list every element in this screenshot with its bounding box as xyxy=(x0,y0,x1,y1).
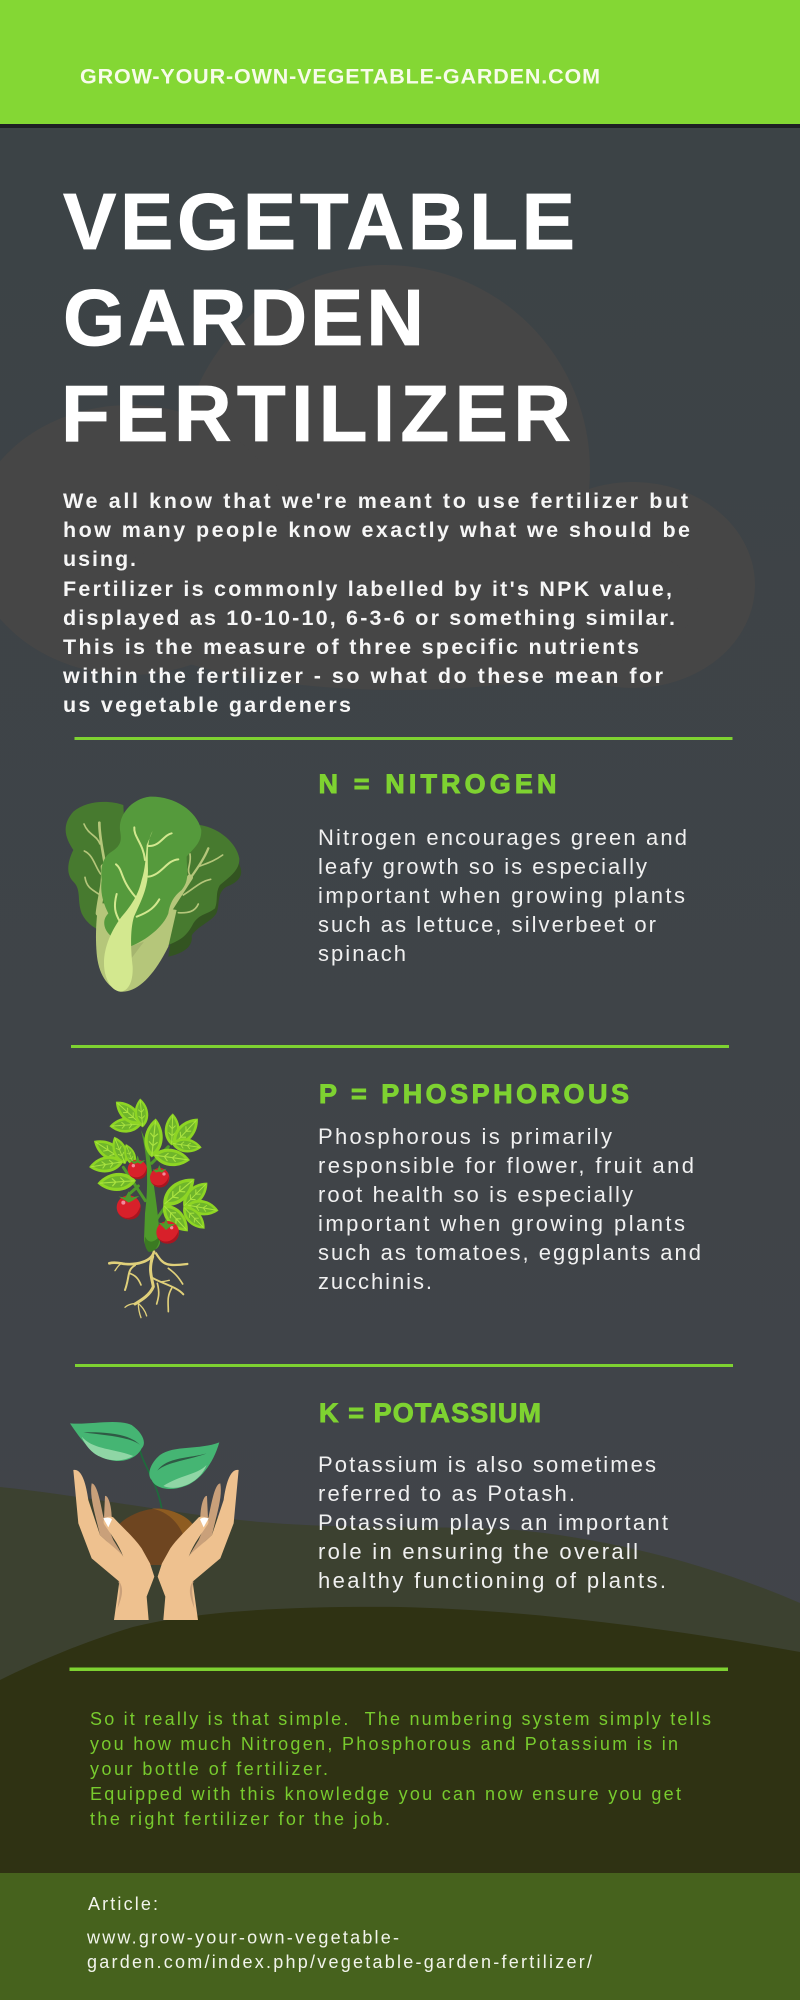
closing text: you how much Nitrogen, Phosphorous and Potassium is in xyxy=(90,1734,678,1754)
text: phosphorous body: such as tomatoes, eggplants and xyxy=(318,1240,701,1265)
text: phosphorous body: root health so is especially xyxy=(318,1182,633,1207)
text: phosphorous body: zucchinis. xyxy=(318,1269,432,1294)
text: potassium body: role in ensuring the overall xyxy=(318,1539,638,1564)
intro text: This is the measure of three specific nutrients xyxy=(63,635,639,659)
text: phosphorous body: responsible for flower, fruit and xyxy=(318,1153,694,1178)
title: FERTILIZER xyxy=(61,369,571,458)
intro text: We all know that we're meant to use fertilizer but xyxy=(63,489,688,513)
left hand xyxy=(73,1470,154,1620)
roots xyxy=(109,1252,187,1318)
footer band xyxy=(0,1873,800,2000)
icon: tomato plant xyxy=(88,1096,220,1318)
leaves xyxy=(109,1116,142,1134)
text: nitrogen body: important when growing plants xyxy=(318,883,685,908)
closing text: So it really is that simple. The numbering system simply tells xyxy=(90,1709,711,1729)
heading: phosphorous: P = PHOSPHOROUS xyxy=(319,1079,629,1109)
article url: www.grow-your-own-vegetable- xyxy=(86,1928,399,1948)
text: nitrogen body: Nitrogen encourages green and xyxy=(318,825,687,850)
background front hill xyxy=(0,1607,800,1873)
right hand xyxy=(158,1470,239,1620)
closing text: your bottle of fertilizer. xyxy=(90,1759,328,1779)
text: nitrogen body: leafy growth so is especially xyxy=(318,854,647,879)
seedling xyxy=(139,1447,162,1508)
intro text: within the fertilizer - so what do these mean for xyxy=(62,664,664,688)
text: potassium body: Potassium plays an important xyxy=(318,1510,668,1535)
text: potassium body: referred to as Potash. xyxy=(318,1481,575,1506)
section: phosphorous xyxy=(318,1079,701,1294)
title: VEGETABLE xyxy=(63,177,575,266)
text: phosphorous body: important when growing plants xyxy=(318,1211,685,1236)
intro text xyxy=(62,489,690,717)
closing text xyxy=(90,1709,711,1829)
intro text: displayed as 10-10-10, 6-3-6 or something similar. xyxy=(63,606,675,630)
site name: GROW-YOUR-OWN-VEGETABLE-GARDEN.COM xyxy=(80,64,600,88)
text: phosphorous body xyxy=(318,1124,701,1294)
heading: potassium: K = POTASSIUM xyxy=(319,1398,541,1428)
text: potassium body: Potassium is also sometimes xyxy=(318,1452,656,1477)
intro text: how many people know exactly what we should be xyxy=(63,518,690,542)
icon: hands holding seedling xyxy=(70,1422,239,1620)
text: nitrogen body xyxy=(318,825,687,966)
text: potassium body: healthy functioning of plants. xyxy=(318,1568,666,1593)
article url: garden.com/index.php/vegetable-garden-fertilizer/ xyxy=(87,1952,592,1972)
section: potassium xyxy=(318,1398,668,1593)
article label: Article: xyxy=(88,1894,158,1914)
text: nitrogen body: such as lettuce, silverbeet or xyxy=(318,912,656,937)
intro text: Fertilizer is commonly labelled by it's NPK value, xyxy=(63,577,672,601)
tomatoes xyxy=(117,1155,179,1244)
text: potassium body xyxy=(318,1452,668,1593)
section: nitrogen xyxy=(318,769,687,966)
soil xyxy=(118,1508,193,1565)
intro text: using. xyxy=(63,547,136,571)
stem and branches xyxy=(123,1147,168,1222)
closing text: Equipped with this knowledge you can now ensure you get xyxy=(90,1784,681,1804)
closing text: the right fertilizer for the job. xyxy=(90,1809,390,1829)
heading: nitrogen: N = NITROGEN xyxy=(318,769,556,799)
background clouds xyxy=(0,265,755,690)
text: phosphorous body: Phosphorous is primarily xyxy=(318,1124,612,1149)
title xyxy=(61,177,575,458)
icon: lettuce xyxy=(66,797,241,992)
intro text: us vegetable gardeners xyxy=(63,693,351,717)
title: GARDEN xyxy=(63,273,424,362)
header band xyxy=(0,0,800,128)
article url xyxy=(86,1928,592,1972)
text: nitrogen body: spinach xyxy=(318,941,406,966)
background rear hill xyxy=(0,1487,800,1873)
